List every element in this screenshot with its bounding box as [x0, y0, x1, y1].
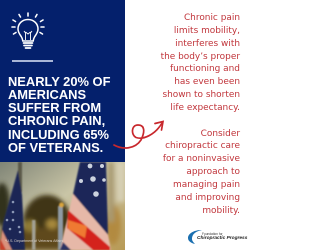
divider rule	[12, 60, 53, 62]
text block: chronic pain effects: functioning and	[170, 64, 240, 74]
logo: Foundation for Chiropractic Progress: Chiropractic Progress	[197, 236, 247, 241]
headline: AMERICANS	[8, 87, 86, 102]
headline: INCLUDING 65%	[8, 127, 109, 142]
text block: consider chiropractic care	[163, 128, 240, 216]
text block: chronic pain effects: Chronic pain	[184, 13, 240, 23]
headline	[8, 74, 110, 155]
text block: consider chiropractic care: approach to	[186, 167, 240, 177]
icon: light bulb	[11, 12, 45, 49]
text block: consider chiropractic care: Consider	[201, 128, 240, 138]
headline: OF VETERANS.	[8, 140, 103, 155]
arrow: looping red arrow	[113, 120, 164, 149]
text block: consider chiropractic care: and improving	[175, 193, 240, 203]
headline: SUFFER FROM	[8, 100, 101, 115]
text block: chronic pain effects: limits mobility,	[174, 26, 240, 36]
text block: chronic pain effects: interferes with	[175, 39, 240, 49]
photo: American flags at sunset	[0, 162, 125, 250]
photo credit caption: *U.S. Department of Veterans Affairs	[5, 239, 63, 243]
headline: CHRONIC PAIN,	[8, 113, 105, 128]
text block: chronic pain effects	[160, 13, 240, 113]
text block: chronic pain effects: life expectancy.	[170, 103, 240, 113]
logo: Foundation for Chiropractic Progress	[188, 230, 248, 244]
text block: consider chiropractic care: mobility.	[202, 206, 240, 216]
logo: Foundation for Chiropractic Progress: Foundation for	[202, 232, 223, 236]
text block: consider chiropractic care: for a noninvasive	[163, 154, 240, 164]
text block: chronic pain effects: the body’s proper	[161, 52, 240, 62]
text block: consider chiropractic care: managing pain	[173, 180, 240, 190]
panel: navy headline block	[0, 0, 125, 162]
text block: consider chiropractic care: chiropractic care	[165, 141, 240, 151]
text block: chronic pain effects: has even been	[174, 77, 240, 87]
headline: NEARLY 20% OF	[8, 74, 110, 88]
text block: chronic pain effects: shown to shorten	[162, 90, 240, 100]
